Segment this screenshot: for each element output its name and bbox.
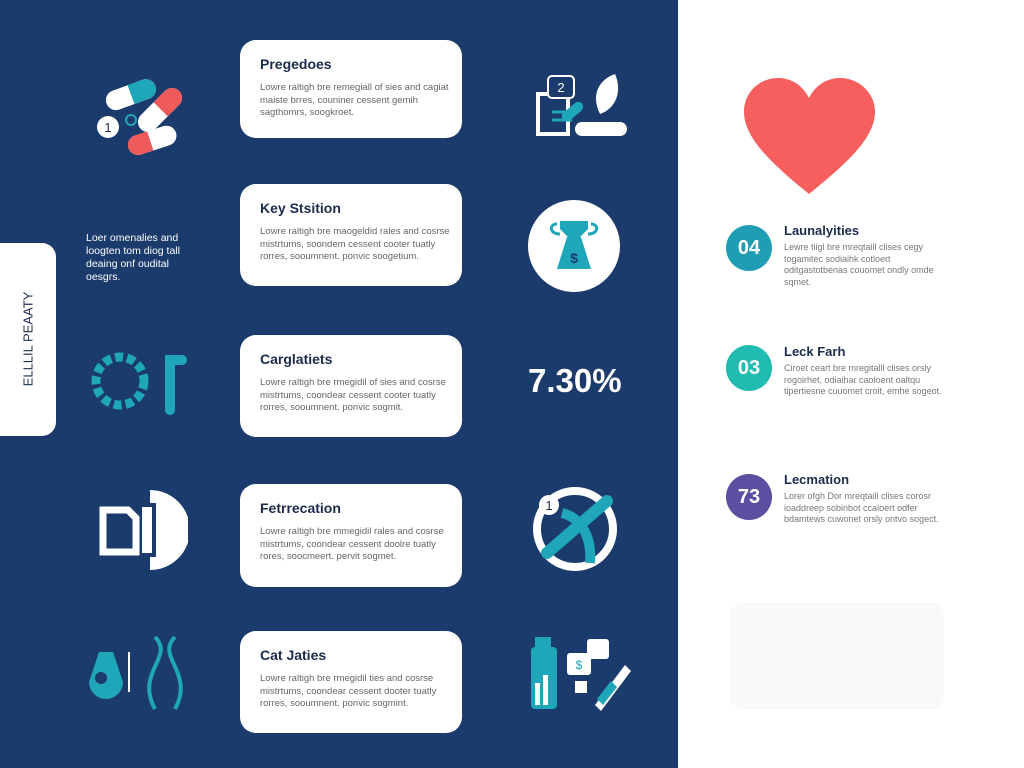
icon: machine	[100, 490, 188, 570]
card 4	[240, 484, 462, 587]
text: Leck Farh	[784, 344, 845, 359]
card 2: Lowre raltigh bre maogeldid rales and cosrse mistrtums, soondem cessent cooter tuatly rorres, sooumnent. ponvic soogetium.	[260, 226, 450, 262]
icon: bottle, chart and pen: $	[576, 658, 583, 672]
item 03: 03	[738, 357, 760, 379]
card 5	[240, 631, 462, 733]
item 04: 04	[738, 237, 760, 259]
card 4: Lowre raltigh bre mmegidil rales and cosrse mistrtums, coondear cessent doolre tuatly rores, soocmeert. pervit sogmet.	[260, 526, 444, 562]
text: Lecmation	[784, 472, 849, 487]
icon: crossed circle: 1	[545, 498, 553, 513]
card 3: Carglatiets	[260, 351, 332, 367]
card 1: Lowre raltigh bre remegiall of sies and cagiat maiste brres, couniner cessent gemih sagthomrs, soogkroet.	[260, 82, 449, 118]
side tab: ELLLIL PEAATY	[20, 292, 36, 386]
side tab	[0, 243, 56, 436]
icon: bottle, chart and pen	[531, 637, 631, 711]
icon: flask and DNA	[89, 636, 183, 710]
item 73	[726, 474, 772, 520]
icon: money trophy circle: $	[570, 250, 578, 266]
item 73: 73	[738, 486, 760, 508]
icon: gear ring and hook	[92, 352, 187, 415]
card 2	[240, 184, 462, 286]
text: Launalyities	[784, 223, 859, 238]
item 03	[726, 345, 772, 391]
icon: crossed circle	[533, 487, 617, 571]
navy background panel	[0, 0, 678, 768]
icon: heart	[744, 78, 875, 194]
icon: pills	[97, 79, 182, 155]
card 4: Fetrrecation	[260, 500, 341, 516]
card 5: Lowre raltigh bre rmegidil ties and cosrse mistrtums, coondear cessent dooter tuatly rorres, sooumnent. ponvic sogmint.	[260, 673, 436, 709]
card 3	[240, 335, 462, 437]
card 1	[240, 40, 462, 138]
icon: money trophy circle	[528, 200, 620, 292]
text: Ciroet ceart bre mregitalll clises orsly rogoirhet, odiaihar caoloent oaltqu tipertiesne cuuomet croit, emhe sogeot.	[784, 363, 942, 396]
text: Lewre tiigl bre mreqtaill clises cegy togamitec sodiaihk cotloert oditgastotbenas couomet ondly omde sqmet.	[784, 242, 934, 286]
icon: pills: 1	[104, 120, 112, 135]
text: Lorer ofgh Dor mreqtaill clises corosr ioaddreep sobinbot ccaloert odfer bdamtews cuwonet orsly ontvo sogect.	[784, 491, 939, 524]
icon: document and leaf: 2	[557, 80, 565, 95]
left text block: Loer omenalies and loogten tom diog tall deaing onf oudital oesgrs.	[86, 232, 180, 283]
item 04	[726, 225, 772, 271]
card 1: Pregedoes	[260, 56, 332, 72]
faint placeholder box	[730, 602, 944, 710]
icon: document and leaf	[536, 74, 627, 136]
card 3: Lowre raltigh bre rmegidil of sies and cosrse mistrtums, coondear cessent cooter tuatly rorres, sooumnent. ponvic sogmit.	[260, 377, 446, 413]
card 5: Cat Jaties	[260, 647, 326, 663]
big percent statistic: 7.30%	[528, 362, 622, 399]
card 2: Key Stsition	[260, 200, 341, 216]
